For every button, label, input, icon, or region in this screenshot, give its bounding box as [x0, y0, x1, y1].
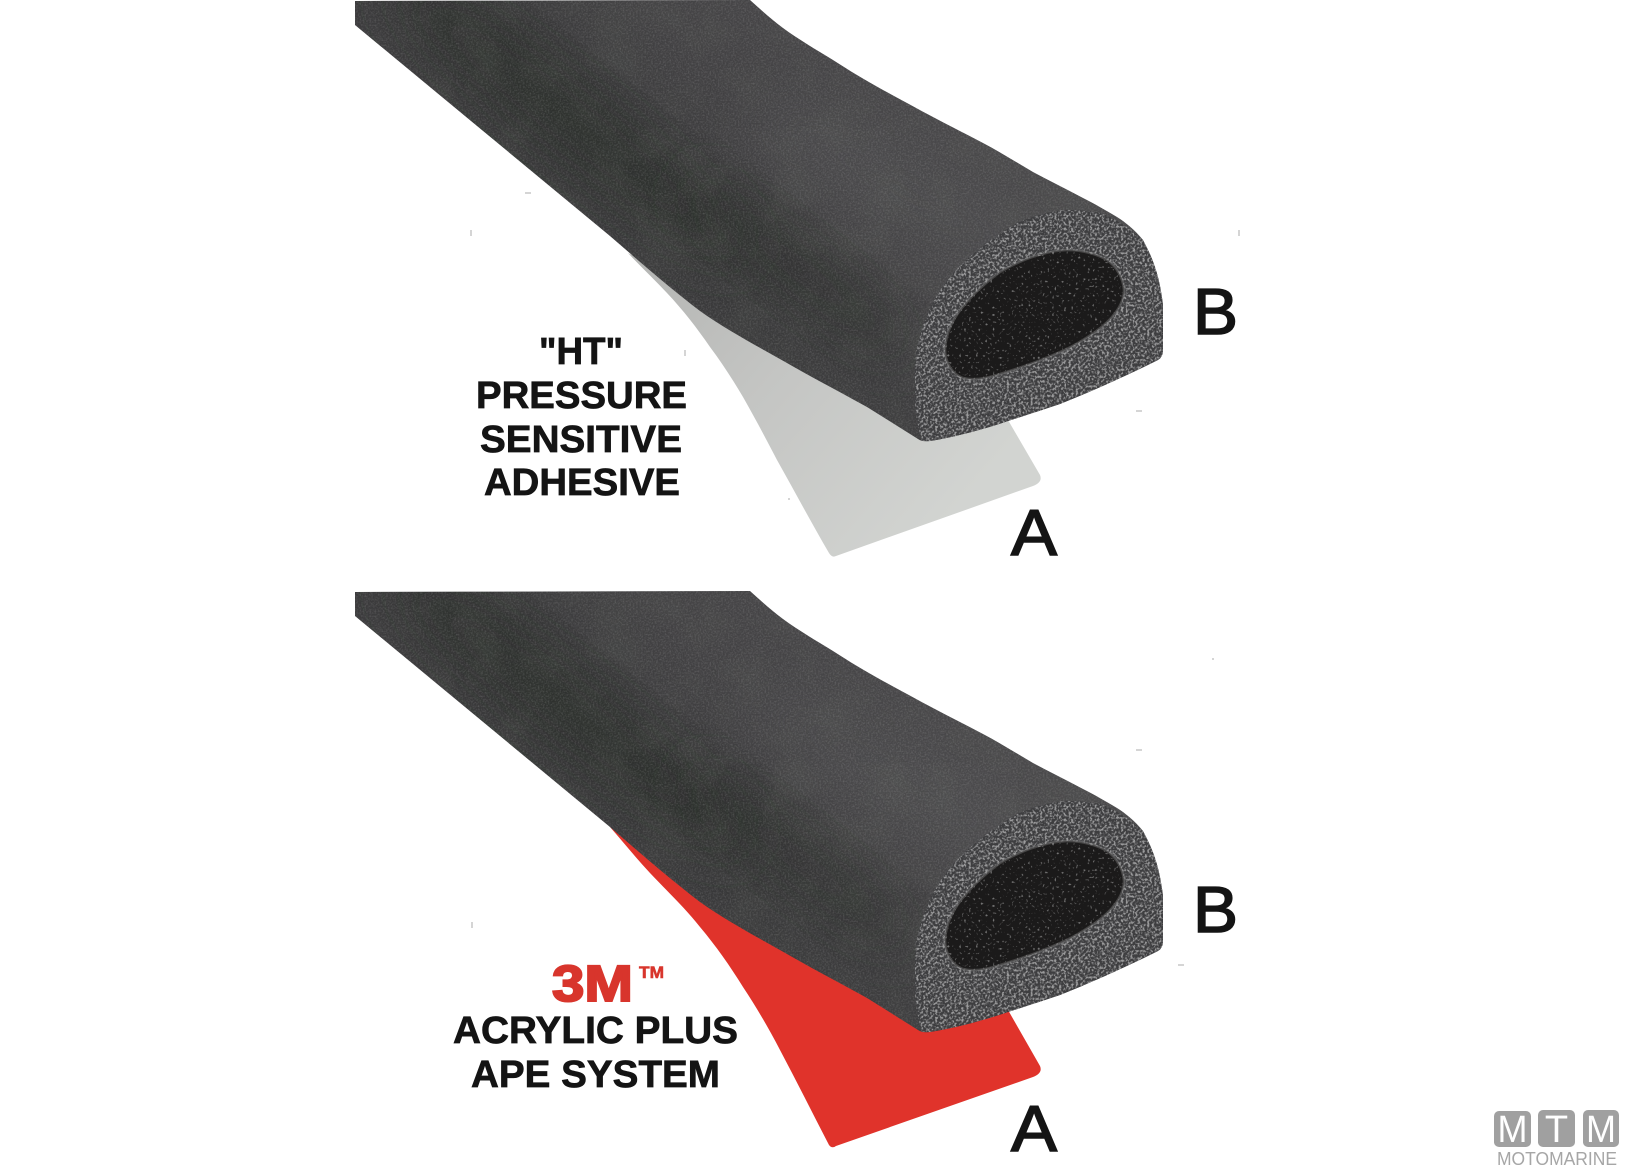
text: 3M trademark [552, 955, 664, 1012]
text: HT pressure sensitive adhesive: ADHESIVE [484, 462, 680, 504]
adhesive tape: red liner A [610, 827, 1041, 1147]
panel: 3M acrylic plus APE seal [355, 591, 1236, 1152]
text: 3M trademark: 3M [552, 955, 633, 1012]
text: HT pressure sensitive adhesive: "HT" [539, 331, 623, 373]
label B: B [1193, 873, 1238, 946]
foam seal strip B [350, 0, 1170, 450]
strip end face [914, 210, 1163, 441]
logo: MTM Motomarine: MOTOMARINE [1497, 1149, 1617, 1169]
hollow core [945, 841, 1124, 970]
text: HT pressure sensitive adhesive [476, 331, 687, 504]
label A: A [1011, 496, 1058, 569]
logo: MTM Motomarine: M [1586, 1109, 1616, 1151]
logo: MTM Motomarine: T [1545, 1109, 1568, 1151]
label A: A [1011, 1092, 1058, 1165]
adhesive tape: grey liner A [628, 253, 1041, 557]
logo: MTM Motomarine [1494, 1109, 1619, 1169]
strip end face [914, 801, 1163, 1032]
text: 3M trademark: TM [639, 963, 664, 982]
foam seal strip B [355, 591, 1163, 1032]
panel: HT pressure sensitive adhesive seal [350, 0, 1238, 569]
text: HT pressure sensitive adhesive: SENSITIVE [480, 419, 682, 461]
logo: MTM Motomarine: M [1498, 1109, 1528, 1151]
text: acrylic plus APE system: ACRYLIC PLUS [453, 1010, 738, 1052]
text: HT pressure sensitive adhesive: PRESSURE [476, 375, 687, 417]
text: acrylic plus APE system [453, 1010, 738, 1096]
text: acrylic plus APE system: APE SYSTEM [471, 1054, 720, 1096]
hollow core [945, 250, 1124, 379]
label B: B [1193, 275, 1238, 348]
